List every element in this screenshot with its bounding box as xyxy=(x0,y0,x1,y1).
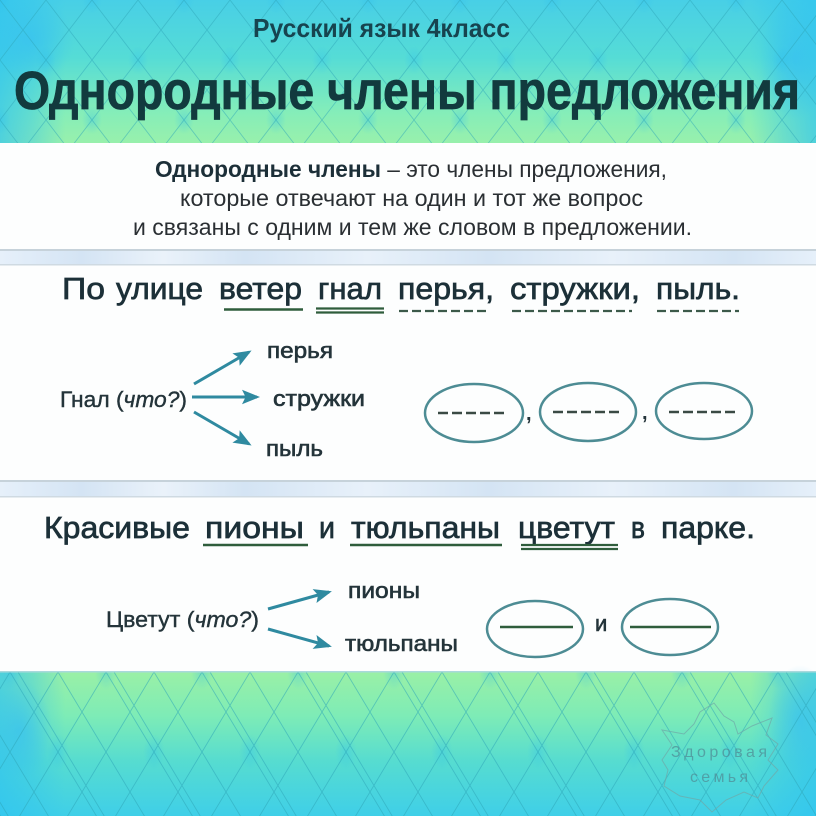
example sentence 1: ветер xyxy=(219,271,302,306)
label: Гнал (что?): Гнал (что?) xyxy=(60,387,187,412)
example sentence 2: в xyxy=(631,510,645,545)
example sentence 2: тюльпаны xyxy=(351,510,500,545)
example sentence 1: стружки, xyxy=(510,271,640,306)
header banner xyxy=(0,0,816,143)
answers: стружки xyxy=(273,386,365,411)
example sentence 1: пыль. xyxy=(656,271,740,306)
definition text block: и связаны с одним и тем же словом в предложении. xyxy=(133,214,692,240)
example sentence 1: По xyxy=(62,271,105,306)
answers: перья xyxy=(267,338,333,363)
watermark: Здоровая семья: семья xyxy=(690,769,748,786)
example sentence 1 xyxy=(62,271,740,312)
example sentence 1: перья, xyxy=(398,271,494,306)
definition text block xyxy=(133,156,692,240)
example sentence 2: цветут xyxy=(518,510,615,545)
scheme 1: ovals with dashed lines: , xyxy=(642,402,648,424)
sentence 2 underlines xyxy=(203,545,618,549)
diagram 2: question arrows xyxy=(106,578,458,656)
scheme 1: ovals with dashed lines xyxy=(425,383,752,442)
divider band 1 xyxy=(0,249,816,266)
sentence 1 underlines xyxy=(224,308,739,312)
example sentence 2: парке. xyxy=(661,510,755,545)
example sentence 2: и xyxy=(319,510,335,545)
answers: тюльпаны xyxy=(345,631,458,656)
scheme 2: ovals with solid lines: и xyxy=(595,611,607,636)
subtitle: Русский язык 4класс xyxy=(253,13,510,43)
arrows xyxy=(192,352,257,444)
arrows xyxy=(268,592,329,646)
example sentence 2: пионы xyxy=(205,510,304,545)
answers xyxy=(345,578,458,656)
watermark: Здоровая семья xyxy=(662,703,778,812)
label: Цветут (что?): Цветут (что?) xyxy=(106,607,259,632)
example sentence 2 xyxy=(44,510,755,549)
watermark: Здоровая семья: Здоровая xyxy=(671,744,767,761)
example sentence 1: улице xyxy=(116,271,203,306)
answers: пионы xyxy=(348,578,420,603)
example sentence 1: гнал xyxy=(318,271,382,306)
answers xyxy=(266,338,365,461)
answers: пыль xyxy=(266,436,323,461)
scheme 1: ovals with dashed lines: , xyxy=(526,403,532,425)
diagram 1: question arrows xyxy=(60,338,365,461)
footer band xyxy=(0,665,816,816)
definition text block: Однородные члены – это члены предложения, xyxy=(155,156,667,182)
definition text block: которые отвечают на один и тот же вопрос xyxy=(180,185,643,211)
example sentence 2: Красивые xyxy=(44,510,190,545)
scheme 2: ovals with solid lines xyxy=(487,599,718,657)
divider band 2 xyxy=(0,480,816,498)
